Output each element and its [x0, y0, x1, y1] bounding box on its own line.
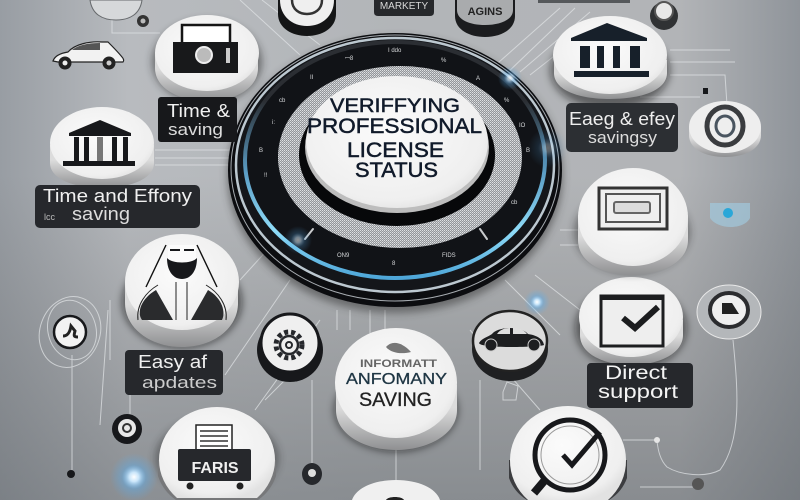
dial glyph marks: %: [504, 98, 510, 104]
dial glyph marks: [259, 48, 530, 267]
label: top center cut off: [374, 0, 434, 16]
icon: bank: [63, 120, 135, 166]
button: top left cut off: [90, 0, 149, 27]
dial title: LICENSE: [347, 139, 444, 162]
badge: top left of dial: [278, 0, 336, 36]
dial glyph marks: IO: [519, 123, 526, 129]
small badge right upper: [689, 101, 761, 157]
label: top right cut off: [538, 0, 630, 3]
dial glyph marks: cb: [511, 200, 518, 206]
small badge top right: [650, 2, 678, 30]
button: device icon: [152, 15, 262, 104]
dial glyph marks: !!: [264, 173, 268, 179]
button: document frame: [574, 168, 690, 275]
button: magnifier with check: [509, 406, 627, 500]
dial hatched ring: [278, 66, 522, 248]
small node dots: [67, 88, 708, 490]
glow: bottom left: [110, 453, 158, 500]
icon: blue shield glow: [710, 203, 750, 227]
button text: [346, 358, 447, 411]
button text: INFORMATT: [360, 358, 437, 370]
label: Direct Support: support: [598, 382, 679, 403]
label: Eaeg & efey savingsy: Eaeg & efey: [569, 109, 675, 129]
dial center button: [305, 76, 489, 213]
glow: dial right haze: [528, 128, 568, 168]
label: Time & saving: [158, 97, 237, 142]
dial glyph marks: 8: [392, 261, 396, 267]
dial title: [307, 96, 482, 182]
icon: small animal: [386, 343, 411, 353]
label: Time and Effony saving: Time and Effony: [43, 186, 192, 206]
icon: bank: [571, 23, 649, 77]
dial glyph marks: B: [526, 148, 530, 154]
icon: car: [479, 328, 544, 351]
dial title: PROFESSIONAL: [307, 115, 482, 138]
dial title: STATUS: [355, 159, 438, 182]
icon: magnifier check: [534, 420, 605, 493]
button: bank left: [50, 107, 154, 188]
button: Automation saving: [334, 328, 458, 452]
label: Time & saving: Time &: [167, 101, 230, 121]
button: bank right: [550, 16, 670, 110]
dial needles: [305, 229, 487, 239]
button: person: [122, 234, 242, 348]
small badge bottom center: [302, 463, 322, 485]
glow: dial top right: [498, 66, 522, 90]
icon: FARIS sign: FARIS: [191, 460, 239, 477]
dial glyph marks: ON9: [337, 253, 350, 259]
small badge left: [54, 316, 86, 348]
label: Easy af apdates: [125, 350, 223, 395]
label: Time & saving: saving: [168, 120, 223, 139]
label: Easy af apdates: apdates: [142, 373, 217, 392]
dial drop shadow: [227, 37, 563, 313]
button: checkbox: [575, 277, 687, 370]
icon: frame: [599, 188, 667, 229]
label: Time and Effony saving: [35, 185, 200, 228]
small badge bottom left: [112, 414, 142, 444]
glow: right of dial: [524, 289, 550, 315]
icon: person: [138, 245, 226, 320]
small badge right lower: [697, 285, 761, 339]
label: top center cut off: MARKETY: [380, 1, 428, 12]
button text: SAVING: [359, 390, 432, 411]
dial glyph marks: %: [441, 58, 447, 64]
label: Time and Effony saving: saving: [72, 204, 130, 224]
badge: top center dark: AGINS: [468, 6, 502, 18]
button: FARIS: [155, 407, 279, 500]
glow: dial bottom left: [284, 226, 312, 254]
dial outer rims: [228, 33, 562, 307]
button: bottom center cut off: [352, 480, 440, 500]
dial title: VERIFFYING: [330, 96, 460, 117]
icon: device: [173, 25, 238, 73]
label: Direct Support: [587, 363, 693, 408]
label: Eaeg & efey savingsy: savingsy: [588, 128, 658, 147]
car badge: [472, 311, 548, 381]
badge: top center dark: [455, 0, 515, 37]
label: Easy af apdates: Easy af: [138, 352, 208, 372]
icon: gear: [276, 332, 302, 358]
label: Direct Support: Direct: [605, 363, 668, 384]
icon: car outline top left: [53, 42, 124, 70]
dial glyph marks: FIDS: [442, 253, 456, 259]
icon: checkbox: [601, 296, 663, 346]
central dial: Verifying Professional License Status: [227, 33, 563, 313]
dial glyph marks: A: [476, 76, 480, 82]
gear badge: [257, 314, 323, 382]
label: Time and Effony saving: lcc: [44, 212, 55, 222]
dial black collar: [299, 84, 495, 226]
dial glyph marks: ꟷ8: [345, 56, 354, 62]
button text: ANFOMANY: [346, 371, 447, 388]
dial glyph marks: II: [310, 75, 314, 81]
label: Eaeg & efey savingsy: [566, 103, 678, 152]
icon: ring: [707, 107, 743, 145]
dial glyph marks: B: [259, 148, 263, 154]
dial glyph marks: i:: [272, 120, 275, 126]
dial glyph marks: I ddo: [388, 48, 402, 54]
dial glyph marks: cb: [279, 98, 286, 104]
